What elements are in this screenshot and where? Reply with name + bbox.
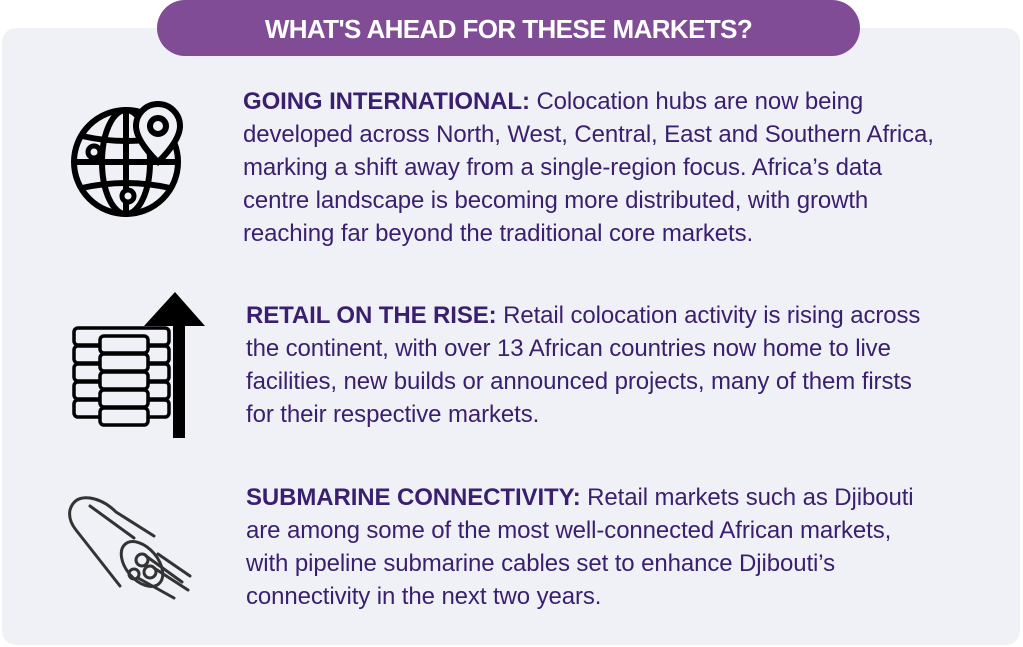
text: submarine connectivity: with pipeline submarine cables set to enhance Djibouti’s — [246, 550, 835, 577]
text: submarine connectivity: connectivity in the next two years. — [246, 583, 601, 610]
text: going international: centre landscape is becoming more distributed, with growth — [243, 187, 868, 214]
icon: submarine cable — [68, 496, 192, 600]
icon: globe with location pin — [71, 101, 183, 217]
title pill — [157, 0, 860, 56]
text: retail on the rise: RETAIL ON THE RISE: Retail colocation activity is rising across — [246, 302, 920, 329]
text: going international: developed across North, West, Central, East and Southern Africa, — [243, 121, 934, 148]
text: submarine connectivity: SUBMARINE CONNECTIVITY: Retail markets such as Djibouti — [246, 484, 914, 511]
text: retail on the rise: the continent, with over 13 African countries now home to live — [246, 335, 891, 362]
title pill: WHAT'S AHEAD FOR THESE MARKETS? — [265, 14, 752, 44]
text: submarine connectivity: are among some of the most well-connected African markets, — [246, 517, 891, 544]
text: retail on the rise: for their respective markets. — [246, 401, 539, 428]
text: going international: reaching far beyond the traditional core markets. — [243, 220, 753, 247]
text: retail on the rise — [246, 302, 920, 428]
text: going international: GOING INTERNATIONAL: Colocation hubs are now being — [243, 88, 863, 115]
icon: servers with up arrow — [72, 292, 205, 438]
text: submarine connectivity — [246, 484, 914, 610]
text: going international — [243, 88, 934, 247]
text: going international: marking a shift away from a single-region focus. Africa’s data — [243, 154, 882, 181]
text: retail on the rise: facilities, new builds or announced projects, many of them firsts — [246, 368, 912, 395]
